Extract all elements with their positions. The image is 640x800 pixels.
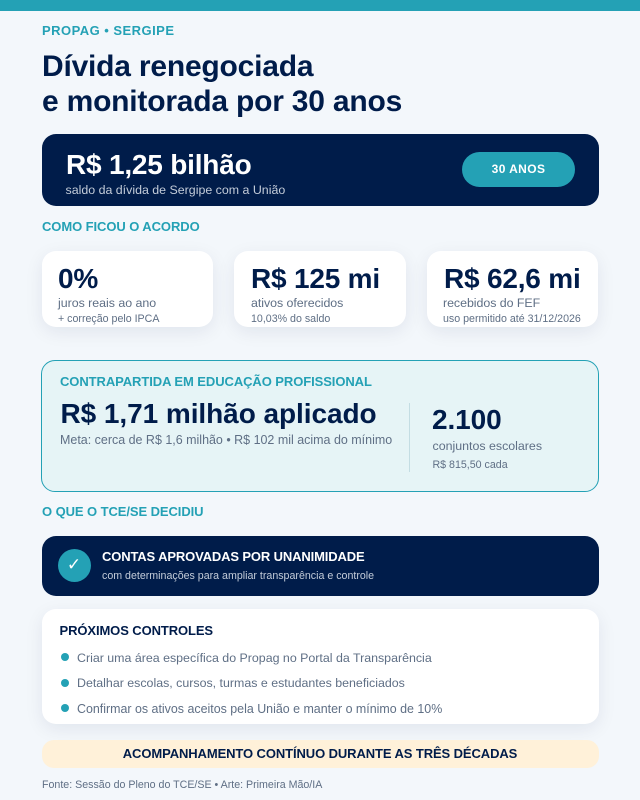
debt value: R$ 1,25 bilhão <box>66 149 252 180</box>
approval heading: CONTAS APROVADAS POR UNANIMIDADE <box>102 549 365 564</box>
banner <box>42 740 598 768</box>
card: ativos <box>234 251 406 327</box>
sets note: R$ 815,50 cada <box>432 458 508 470</box>
top bar <box>0 0 640 10</box>
section heading: decisão: O QUE O TCE/SE DECIDIU <box>42 504 203 518</box>
section heading: acordo: COMO FICOU O ACORDO <box>42 219 200 234</box>
bullet 3 <box>61 704 69 712</box>
label: recebidos do FEF <box>443 296 540 310</box>
divider <box>408 402 410 472</box>
main value: R$ 1,71 milhão aplicado <box>60 398 377 429</box>
note: + correção pelo IPCA <box>58 312 159 324</box>
debt caption: saldo da dívida de Sergipe com a União <box>66 183 285 197</box>
label: ativos oferecidos <box>251 296 343 310</box>
panel: education <box>41 360 599 492</box>
label: juros reais ao ano <box>58 296 156 310</box>
panel heading: CONTRAPARTIDA EM EDUCAÇÃO PROFISSIONAL <box>60 374 372 389</box>
panel: approval <box>42 536 598 596</box>
item 2: Detalhar escolas, cursos, turmas e estudantes beneficiados <box>77 676 405 690</box>
banner: ACOMPANHAMENTO CONTÍNUO DURANTE AS TRÊS DÉCADAS <box>123 746 517 760</box>
note: uso permitido até 31/12/2026 <box>443 312 581 324</box>
eyebrow: PROPAG • SERGIPE <box>42 22 174 38</box>
panel: debt balance <box>42 134 598 206</box>
panel: next controls <box>42 609 598 724</box>
icon: check: ✓ <box>67 555 81 575</box>
value: 0% <box>58 262 98 294</box>
card: juros <box>42 251 213 327</box>
icon: check <box>58 549 90 582</box>
value: R$ 62,6 mi <box>444 262 581 294</box>
approval caption: com determinações para ampliar transparência e controle <box>102 570 374 582</box>
note: 10,03% do saldo <box>251 312 330 324</box>
item 3: Confirmar os ativos aceitos pela União e manter o mínimo de 10% <box>77 702 442 716</box>
bullet 1 <box>61 653 69 661</box>
main caption: Meta: cerca de R$ 1,6 milhão • R$ 102 mil acima do mínimo <box>60 432 392 446</box>
title: e monitorada por 30 anos <box>42 84 402 118</box>
sets value: 2.100 <box>432 404 502 434</box>
bullet 2 <box>61 678 69 686</box>
title: Dívida renegociada <box>42 50 313 82</box>
pill: 30 anos <box>462 152 575 187</box>
pill: 30 anos: 30 ANOS <box>492 162 545 176</box>
panel heading: PRÓXIMOS CONTROLES <box>60 622 213 638</box>
source: Fonte: Sessão do Pleno do TCE/SE • Arte: Primeira Mão/IA <box>42 778 322 790</box>
value: R$ 125 mi <box>251 262 380 294</box>
card: FEF <box>427 251 598 327</box>
title <box>42 50 402 118</box>
item 1: Criar uma área específica do Propag no Portal da Transparência <box>77 651 432 665</box>
sets label: conjuntos escolares <box>432 439 542 453</box>
